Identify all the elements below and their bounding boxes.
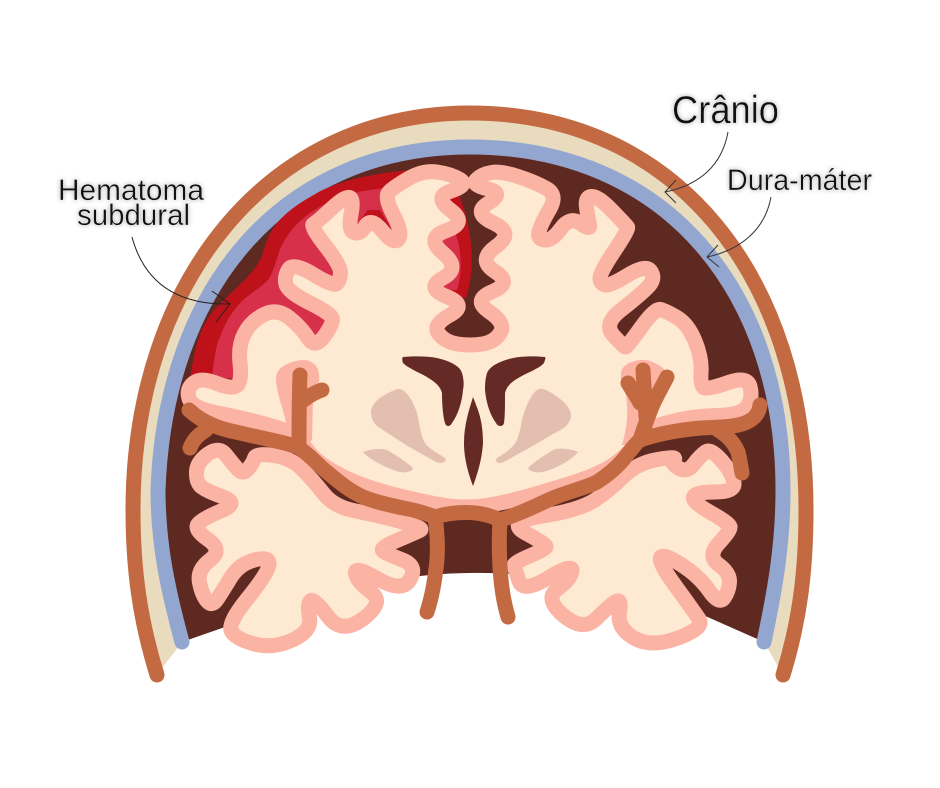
label: hematoma subdural: Hematoma (58, 174, 204, 207)
brain upper hemispheres (188, 172, 751, 507)
brain lower right lobe (514, 451, 734, 643)
label: hematoma subdural: subdural (77, 199, 190, 232)
skull outer layer (133, 113, 806, 675)
label: cranio: Crânio (672, 89, 779, 132)
label: dura mater: Dura-máter (727, 164, 872, 197)
arrow: hematoma (132, 237, 230, 322)
vessels (189, 370, 760, 617)
left pink sheath around vessel (276, 360, 319, 450)
ventricles (402, 356, 545, 486)
label: hematoma subdural (58, 174, 204, 232)
arrow: cranio (665, 132, 728, 203)
dura mater (158, 147, 783, 642)
brain lower left lobe (196, 450, 421, 646)
subdural space (158, 147, 783, 642)
right pink sheath around vessel (621, 360, 665, 445)
hematoma (190, 170, 472, 380)
arrow: dura (707, 197, 771, 267)
skull bone layer (133, 113, 806, 675)
basal ganglia (363, 389, 578, 472)
